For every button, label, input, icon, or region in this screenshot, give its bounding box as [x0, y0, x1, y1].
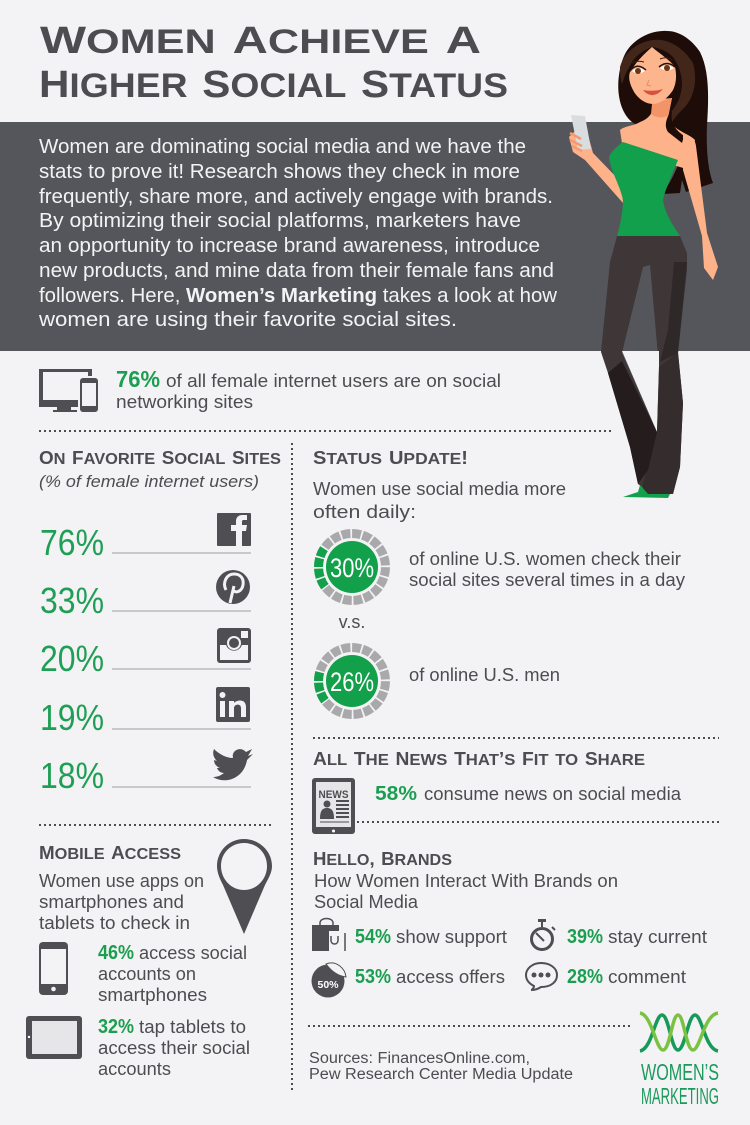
stat: 76% icon devices	[39, 369, 100, 414]
icon: stopwatch	[532, 919, 555, 950]
stat: 53% offers: access offers	[396, 967, 505, 987]
chart: social site share	[40, 513, 253, 796]
stat: 76% text: 76%	[116, 366, 160, 392]
panel: intro band	[0, 122, 750, 351]
chart: social site share: 18%	[40, 755, 104, 796]
logo: Women's Marketing: WOMEN’S	[641, 1059, 719, 1085]
heading: favorite social sites: On Favorite Social Sites	[39, 443, 281, 469]
stat: 32% tablets: accounts	[98, 1059, 171, 1079]
left arm holding phone	[569, 128, 623, 203]
intro text block: new products, and mine data from their female fans and	[39, 260, 554, 282]
intro text block: stats to prove it! Research shows they check in more	[39, 161, 520, 183]
illustration: woman with phone	[569, 31, 718, 498]
icon: twitter	[213, 749, 253, 780]
versus label: v.s.	[339, 612, 365, 632]
stat: 32% tablets	[98, 1016, 250, 1079]
stat: 58% news: consume news on social media	[424, 784, 682, 804]
intro text block: followers. Here, Women’s Marketing takes a look at how	[39, 285, 558, 307]
stat: 54% support: show support	[396, 927, 507, 947]
pants	[601, 236, 687, 494]
status intro text: often daily:	[313, 502, 416, 522]
icon: speech bubble	[526, 963, 557, 990]
right arm	[683, 135, 718, 280]
stat: 32% tablets: 32%	[98, 1016, 134, 1038]
donut text: women: of online U.S. women check their	[409, 549, 681, 569]
lower right leg	[642, 352, 683, 494]
icon: news tablet	[312, 778, 355, 834]
stat: 46% smartphones: smartphones	[98, 985, 207, 1005]
mobile intro text: smartphones and	[39, 892, 184, 912]
stat: 53% offers: 53%	[355, 966, 391, 988]
stat: 76% text: networking sites	[116, 392, 253, 412]
fingers	[570, 133, 582, 151]
intro text block: frequently, share more, and actively engage with brands.	[39, 186, 553, 208]
hair back	[618, 31, 713, 194]
stat: 39% current: stay current	[608, 927, 707, 947]
icon: sticker 50%: 50%	[317, 979, 339, 991]
stat: 32% tablets: access their social	[98, 1038, 250, 1058]
heading: hello brands: Hello, Brands	[313, 844, 452, 870]
stat: 58% news: 58%	[375, 783, 417, 805]
icon: smartphone	[39, 942, 68, 995]
icon: shopping bag	[312, 918, 345, 951]
stat: 28% comment: 28%	[567, 966, 603, 988]
stat: 76% text: of all female internet users are on social	[166, 371, 501, 391]
intro text block: Women are dominating social media and we have the	[39, 136, 526, 158]
stat: 28% comment	[567, 966, 686, 988]
brands subheading: How Women Interact With Brands on	[314, 871, 618, 891]
mobile intro text: tablets to check in	[39, 913, 190, 933]
intro text block: women are using their favorite social sites.	[38, 309, 457, 331]
stat: 32% tablets: tap tablets to	[139, 1017, 246, 1037]
stat: 46% smartphones	[98, 942, 247, 1005]
heading: status update: Status Update !	[313, 443, 468, 469]
donut: 26% men: 26%	[330, 667, 374, 697]
donut text: men: of online U.S. men	[409, 665, 560, 685]
green top	[609, 142, 680, 237]
intro text block: an opportunity to increase brand awareness, introduce	[39, 235, 540, 257]
stat: 46% smartphones: 46%	[98, 942, 134, 964]
title: Women Achieve A	[40, 11, 481, 64]
title	[39, 11, 508, 108]
stat: 46% smartphones: access social	[139, 943, 247, 963]
status intro text: Women use social media more	[313, 479, 566, 499]
stat: 76% text	[116, 366, 501, 412]
mobile intro text	[39, 871, 204, 933]
title: Higher Social Status	[39, 55, 508, 108]
chart: social site share: 20%	[40, 638, 104, 679]
stat: 53% offers	[355, 966, 505, 988]
icon: instagram	[217, 628, 251, 663]
icon: facebook	[217, 513, 251, 546]
intro text block: By optimizing their social platforms, marketers have	[39, 210, 521, 232]
heading: news: All The News That’s Fit to Share	[313, 744, 645, 770]
pants gap	[622, 265, 659, 432]
sources: Sources: FinancesOnline.com,	[309, 1050, 530, 1067]
gap below band	[622, 351, 659, 432]
icon: pinterest	[216, 570, 250, 604]
brands subheading	[314, 871, 618, 912]
donut text: women: social sites several times in a day	[409, 570, 685, 590]
sources	[309, 1050, 573, 1083]
front hair lock	[666, 112, 684, 143]
logo: Women's Marketing	[640, 1013, 719, 1109]
donut: 30% women: 30%	[330, 553, 374, 583]
icon: news tablet: NEWS	[318, 789, 348, 801]
eyes, nose and mouth	[630, 58, 675, 95]
heading: favorite social sites: (% of female internet users)	[39, 472, 259, 491]
face	[629, 47, 676, 104]
intro text block	[38, 136, 558, 331]
heading: mobile access: Mobile Access	[39, 838, 181, 864]
mobile intro text: Women use apps on	[39, 871, 204, 891]
icon: tablet	[26, 1016, 82, 1059]
neck and shoulders	[620, 98, 695, 170]
lower left leg shade	[608, 361, 657, 484]
stat: 39% current	[567, 926, 707, 948]
stat: 39% current: 39%	[567, 926, 603, 948]
sources: Pew Research Center Media Update	[309, 1066, 573, 1083]
shoe	[623, 485, 670, 498]
icon: location pin	[217, 839, 272, 934]
stat: 28% comment: comment	[608, 967, 686, 987]
heading: favorite social sites	[39, 443, 281, 491]
donut: 26% men	[305, 634, 399, 728]
hair highlight	[620, 40, 695, 127]
phone	[571, 115, 591, 150]
donut text: women	[409, 549, 685, 590]
stat: 46% smartphones: accounts on	[98, 964, 196, 984]
neck shadow	[651, 98, 672, 117]
donut: 30% women	[305, 520, 399, 614]
right leg shade	[660, 262, 687, 362]
icon: sticker 50%	[312, 963, 346, 998]
chart: social site share: 19%	[40, 697, 104, 738]
brands subheading: Social Media	[314, 892, 419, 912]
chart: social site share: 76%	[40, 522, 104, 563]
icon: linkedin	[216, 687, 250, 722]
chart: social site share: 33%	[40, 580, 104, 621]
stat: 54% support	[355, 926, 507, 948]
status intro text	[313, 479, 566, 522]
stat: 54% support: 54%	[355, 926, 391, 948]
